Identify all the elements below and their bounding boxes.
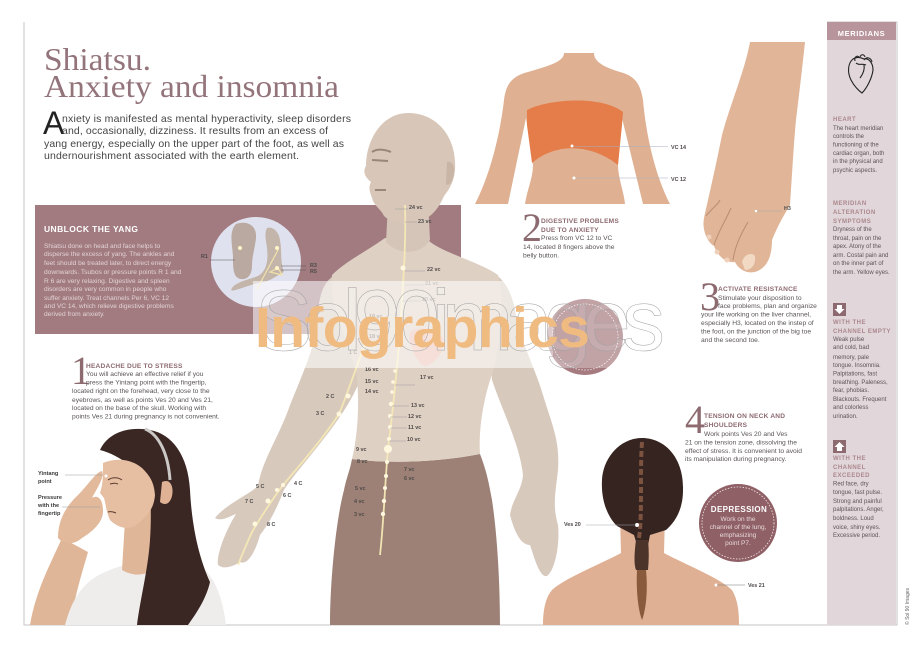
- text: heart: controls the: [833, 134, 865, 140]
- step 4: tension on neck and shoulders: Work points Ves 20 and Ves: [704, 431, 788, 438]
- man: point labels: 16 vc: [365, 367, 378, 373]
- step 1: headache due to stress: press the Yintang point with the fingertip,: [86, 380, 207, 386]
- intro text: [43, 105, 351, 162]
- panel: unblock the yang: [35, 205, 461, 334]
- title: [44, 41, 339, 104]
- man: point labels: 20 vc: [422, 297, 436, 303]
- callout: depression: [699, 484, 777, 562]
- icon: heart: [849, 55, 873, 93]
- man: point labels: 12 vc: [408, 414, 422, 420]
- text: alteration symptoms: ALTERATION: [833, 210, 876, 216]
- man: point labels: 2 C: [326, 394, 334, 400]
- step 2: digestive problems: belly button.: [523, 252, 559, 260]
- text: channel exceeded: CHANNEL: [833, 465, 866, 471]
- step 3: activate resistance: especially H3, located on the instep of: [701, 320, 814, 327]
- circle behind watermark: [547, 299, 623, 375]
- text: channel empty: memory, pale: [833, 355, 870, 361]
- man: left arm: [215, 275, 360, 567]
- step 2: digestive problems: Press from VC 12 to VC: [541, 235, 613, 242]
- step 4: tension on neck and shoulders: 21 on the tension zone, dissolving the: [685, 440, 797, 446]
- watermark: Infographics: [255, 296, 590, 360]
- text: channel empty: Palpitations, fast: [833, 372, 877, 378]
- man: point labels: 24 vc: [409, 205, 422, 211]
- text: alteration symptoms: arm. Costal pain and: [833, 253, 888, 259]
- text: channel empty: and colorless: [833, 405, 868, 411]
- step 3: activate resistance: the foot, on the junction of the big toe: [701, 328, 811, 336]
- step 2: digestive problems: 2: [522, 205, 542, 250]
- intro text: undernourishment associated with the earth element.: [44, 150, 299, 162]
- man: point labels: 1 C: [349, 350, 357, 356]
- text: alteration symptoms: apex. Atony of the: [833, 244, 882, 250]
- man: torso: [332, 238, 501, 462]
- step 1: headache due to stress: located on the base of the skull. Working with: [72, 405, 206, 412]
- step 4: tension on neck and shoulders: SHOULDERS: [704, 422, 748, 429]
- label: yintang point: point: [38, 479, 52, 485]
- step 3: activate resistance: your life working on the liver channel,: [701, 312, 811, 318]
- label: pressure with the fingertip: with the: [37, 503, 59, 509]
- step 1: headache due to stress: located right on the forehead, very close to the: [72, 388, 210, 395]
- text: channel exceeded: boldness. Loud: [833, 516, 874, 522]
- man: point labels: 4 vc: [354, 499, 364, 505]
- woman: neck: [122, 500, 160, 575]
- text: channel empty: breathing. Paleness,: [833, 380, 888, 386]
- man: point labels: 15 vc: [365, 379, 378, 385]
- step 3: activate resistance: and the second toe.: [701, 337, 760, 344]
- man: point labels: 14 vc: [365, 389, 378, 395]
- step 2: digestive problems: DIGESTIVE PROBLEMS: [541, 218, 619, 225]
- text: alteration symptoms: [833, 201, 890, 276]
- text: channel exceeded: Red face, dry: [833, 482, 869, 488]
- man: point labels: 3 vc: [354, 512, 364, 518]
- man: point labels: 5 C: [256, 484, 264, 490]
- text: alteration symptoms: on the inner part of: [833, 261, 884, 267]
- body: unblock the yang: disorders are very common in people who: [44, 286, 167, 293]
- body: unblock the yang: derived from anxiety.: [44, 311, 105, 318]
- label: [757, 210, 782, 212]
- man: neck: [386, 200, 430, 252]
- man: point labels: 17 vc: [420, 375, 434, 381]
- toes: [742, 254, 755, 270]
- text: heart: HEART: [833, 117, 856, 123]
- diagram: foot points circle: R5: [310, 269, 317, 275]
- text: alteration symptoms: the arm. Yellow eyes.: [833, 270, 890, 276]
- man: point labels: 11 vc: [408, 425, 421, 431]
- step 4: tension on neck and shoulders: effect of stress. It is convenient to avoid: [685, 448, 802, 455]
- text: channel exceeded: voice, shiny eyes.: [833, 525, 881, 531]
- text: heart: in the physical and: [833, 159, 883, 165]
- callout: depression: Work on the: [721, 516, 756, 523]
- step 3: activate resistance: ACTIVATE RESISTANCE: [718, 286, 798, 293]
- text: channel exceeded: Excessive period.: [833, 533, 880, 539]
- intro text: and, occasionally, dizziness. It results from an excess of: [62, 125, 328, 137]
- label: pressure with the fingertip: Pressure: [38, 495, 62, 501]
- man: point labels: 8 C: [267, 522, 275, 528]
- woman: hair: [100, 429, 210, 625]
- text: channel empty: tongue. Insomnia.: [833, 363, 881, 369]
- body: unblock the yang: suffer anxiety. Treat channels Per 6, VC 12: [44, 295, 169, 302]
- man: point labels: 18 vc: [369, 334, 382, 340]
- photo: woman pressing forehead: [30, 429, 226, 625]
- text: heart: cardiac organ, both: [833, 151, 884, 157]
- man: point labels: 3 C: [316, 411, 324, 417]
- photo: woman torso with orange top: VC 12: [671, 177, 686, 183]
- text: channel empty: CHANNEL EMPTY: [833, 329, 891, 335]
- label: yintang point: Yintang: [38, 471, 59, 477]
- sidebar heading: MERIDIANS: [838, 29, 885, 38]
- step 1: headache due to stress: You will achieve an effective relief if you: [86, 371, 204, 378]
- labels: VC 14: [671, 145, 686, 151]
- man: point labels: 6 C: [283, 493, 291, 499]
- label: ves 20: [564, 522, 636, 528]
- points: [570, 144, 574, 148]
- intro text: A: [43, 105, 65, 141]
- title: Anxiety and insomnia: [44, 68, 339, 104]
- step 3: activate resistance: 3: [700, 274, 720, 319]
- man: point labels: 4 C: [294, 481, 302, 487]
- man: trunks: [330, 454, 500, 625]
- callout: depression: emphasizing: [720, 532, 757, 539]
- body: unblock the yang: [44, 243, 182, 318]
- text: alteration symptoms: Dryness of the: [833, 227, 872, 233]
- watermark: Sol90images: [255, 273, 665, 369]
- diagram: foot points circle: R3: [310, 263, 317, 269]
- text: channel exceeded: [833, 456, 884, 539]
- label: pressure with the fingertip: [37, 495, 100, 517]
- photo: foot: [703, 42, 805, 272]
- woman: face: [100, 460, 155, 528]
- step 1: headache due to stress: eyebrows, as well as points Ves 20 and Ves 21,: [72, 397, 213, 404]
- photo: back of woman with braid: [543, 438, 765, 625]
- diagram: foot points circle: [201, 217, 317, 307]
- text: alteration symptoms: MERIDIAN: [833, 201, 867, 207]
- man: meridian lines: [238, 205, 405, 565]
- step 3: activate resistance: [700, 274, 817, 344]
- heading: unblock the yang: UNBLOCK THE YANG: [44, 224, 138, 234]
- text: heart: functioning of the: [833, 142, 879, 148]
- body: unblock the yang: downwards. Tsubos or pressure points R 1 and: [44, 269, 182, 276]
- step 1: headache due to stress: [71, 348, 220, 420]
- icon: arrow down: [833, 303, 846, 316]
- intro text: yang energy, especially on the upper part of the foot, as well as: [44, 138, 344, 150]
- body: unblock the yang: Shiatsu done on head and face helps to: [44, 243, 161, 250]
- man: point labels: 21 vc: [425, 281, 438, 287]
- woman: hand: [58, 471, 103, 543]
- step 2: digestive problems: 14, located 8 fingers above the: [523, 244, 615, 251]
- label: ves 21: [717, 583, 765, 589]
- photo: woman torso with orange top: [475, 53, 686, 204]
- man: point labels: 7 C: [245, 499, 253, 505]
- step 4: tension on neck and shoulders: [685, 397, 802, 463]
- text: heart: [833, 117, 884, 174]
- body: unblock the yang: R 6 are very relaxing. Digestive and spleen: [44, 278, 170, 285]
- step 1: headache due to stress: 1: [71, 348, 91, 393]
- orange top: [527, 100, 623, 165]
- step 4: tension on neck and shoulders: 4: [685, 397, 705, 442]
- text: channel empty: [833, 320, 891, 420]
- label: yintang point: [38, 471, 108, 485]
- text: channel exceeded: tongue, fast pulse.: [833, 490, 882, 496]
- step 4: tension on neck and shoulders: its manipulation during pregnancy.: [685, 456, 787, 463]
- step 3: activate resistance: Stimulate your disposition to: [718, 295, 802, 302]
- callout: depression: channel of the lung,: [710, 524, 767, 531]
- text: channel empty: and cold, bad: [833, 345, 869, 351]
- man: heart organ: [410, 329, 444, 366]
- woman: headband: [145, 429, 170, 480]
- text: channel empty: fear, phobias.: [833, 388, 869, 394]
- man: point labels: [245, 205, 440, 528]
- text: alteration symptoms: throat, pain on the: [833, 236, 882, 242]
- text: channel exceeded: WITH THE: [833, 456, 866, 462]
- label: ves 20: Ves 20: [564, 522, 581, 528]
- text: channel exceeded: EXCEEDED: [833, 473, 870, 479]
- text: channel empty: Blackouts. Frequent: [833, 397, 887, 403]
- woman: ear: [160, 481, 173, 504]
- panel: meridians sidebar: [827, 22, 896, 625]
- woman: top: [65, 562, 226, 625]
- man: point labels: 7 vc: [404, 467, 414, 473]
- man: point labels: 19 vc: [369, 314, 382, 320]
- man: point labels: 9 vc: [356, 447, 366, 453]
- text: channel empty: urination.: [833, 414, 858, 420]
- step 3: activate resistance: face problems, plan and organize: [718, 303, 817, 310]
- man: point labels: 5 vc: [355, 486, 366, 492]
- body: unblock the yang: and VC 14, which relieve digestive problems: [44, 303, 174, 310]
- step 4: tension on neck and shoulders: TENSION ON NECK AND: [704, 413, 785, 420]
- callout: depression: point P7.: [725, 540, 751, 547]
- man: point labels: 6 vc: [404, 476, 414, 482]
- man: right arm: [488, 270, 558, 576]
- photo: foot: H3: [784, 206, 791, 212]
- diagram: foot points circle: R1: [201, 254, 208, 260]
- body: unblock the yang: disperse the excess of yang. The ankles and: [44, 251, 175, 258]
- text: heart: The heart meridian: [833, 126, 883, 132]
- man: point labels: 10 vc: [407, 437, 420, 443]
- intro text: nxiety is manifested as mental hyperactivity, sleep disorders: [62, 113, 351, 125]
- man: point labels: 13 vc: [411, 403, 424, 409]
- text: channel empty: Weak pulse: [833, 337, 865, 343]
- man: point labels: 8 vc: [357, 459, 368, 465]
- step 2: digestive problems: DUE TO ANXIETY: [541, 227, 599, 234]
- woman: eye, brow and lips: [108, 478, 122, 513]
- callout: depression: DEPRESSION: [711, 505, 767, 514]
- icon: arrow up: [833, 440, 846, 453]
- step 1: headache due to stress: points Ves 21 during pregnancy is not convenient.: [72, 414, 220, 420]
- credit: © Sol 90 Images: [904, 587, 911, 625]
- label: ves 21: Ves 21: [748, 583, 765, 589]
- body: unblock the yang: feet should be treated later, to direct energy: [44, 260, 172, 267]
- man: point labels: 23 vc: [418, 219, 432, 225]
- title: Shiatsu.: [44, 41, 151, 77]
- text: alteration symptoms: SYMPTOMS: [833, 219, 871, 225]
- man: head: [364, 113, 455, 223]
- man: meridian points: [252, 266, 406, 526]
- illustration: man with meridian points: [215, 113, 558, 625]
- step 2: digestive problems: [522, 205, 619, 260]
- text: channel exceeded: Strong and painful: [833, 499, 882, 505]
- step 1: headache due to stress: HEADACHE DUE TO STRESS: [86, 363, 183, 370]
- woman: arm and shoulders: [30, 538, 88, 625]
- man: point labels: 22 vc: [427, 267, 440, 273]
- text: channel exceeded: palpitations. Anger,: [833, 507, 884, 513]
- text: heart: psychic aspects.: [833, 168, 877, 174]
- text: channel empty: WITH THE: [833, 320, 866, 326]
- label: pressure with the fingertip: fingertip: [38, 511, 61, 517]
